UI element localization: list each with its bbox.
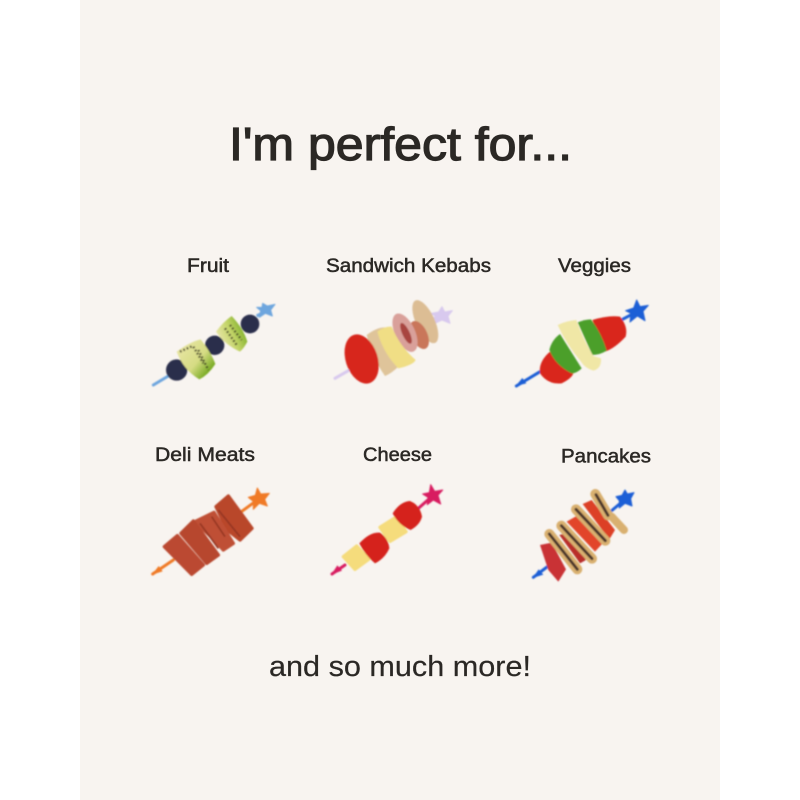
icon: veggie skewer [516, 300, 648, 386]
icon: deli meat skewer [152, 488, 269, 575]
label: Cheese: Cheese [363, 444, 432, 466]
label: Fruit: Fruit [187, 255, 230, 277]
closing line: and so much more! [269, 651, 531, 683]
label: Pancakes: Pancakes [561, 446, 651, 468]
icon: pancake skewer [533, 490, 634, 582]
title: I'm perfect for... [229, 118, 572, 170]
label: Sandwich Kebabs: Sandwich Kebabs [326, 255, 491, 277]
icon: sandwich kebab skewer [335, 297, 452, 388]
icon: cheese skewer [331, 485, 443, 575]
background panel [80, 0, 720, 800]
label: Veggies: Veggies [558, 255, 631, 277]
icon: fruit skewer [153, 303, 275, 385]
label: Deli Meats: Deli Meats [155, 444, 255, 466]
